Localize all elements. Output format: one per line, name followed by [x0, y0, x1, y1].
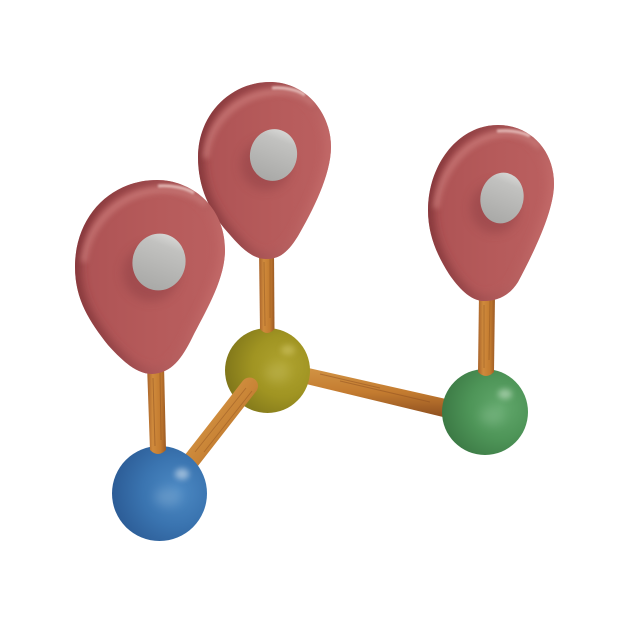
node: yellow sphere	[225, 328, 310, 413]
pin cap: left	[127, 229, 191, 295]
pin: middle	[198, 82, 331, 259]
pin cap: right	[476, 169, 528, 227]
stick: left pin to blue	[147, 365, 166, 454]
stick: yellow to green	[302, 367, 446, 417]
stick: middle pin to yellow	[259, 250, 274, 333]
node: blue sphere	[112, 446, 207, 541]
node: green sphere	[442, 369, 528, 455]
pin: right	[428, 125, 554, 301]
stick: right pin to green	[478, 294, 495, 376]
pin: left	[75, 180, 225, 374]
stick: blue to yellow	[191, 386, 252, 461]
pin cap: middle	[245, 125, 302, 185]
illustration: network of location pins	[75, 82, 554, 541]
